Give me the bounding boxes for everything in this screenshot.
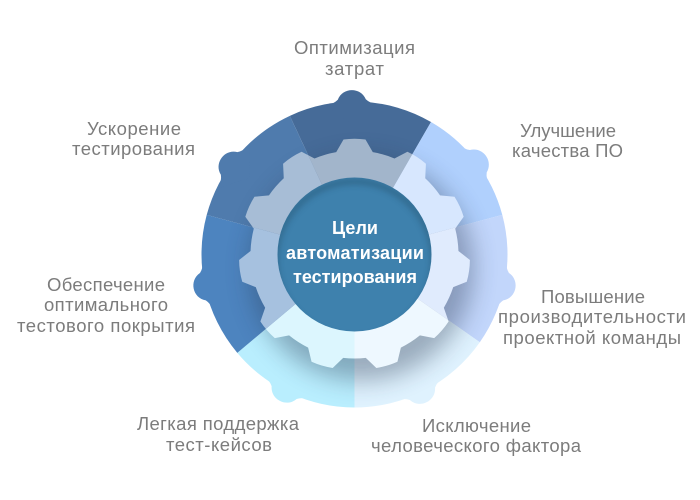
label: Повышение производительности проектной команды: производительности bbox=[498, 306, 686, 327]
label: Оптимизация затрат bbox=[294, 37, 415, 79]
label: Исключение человеческого фактора bbox=[371, 415, 582, 456]
label: Легкая поддержка тест-кейсов: Легкая поддержка bbox=[137, 413, 300, 434]
sector: Обеспечение тестового покрытия bbox=[188, 215, 354, 353]
label: Ускорение тестирования: Ускорение bbox=[87, 118, 181, 139]
label: Легкая поддержка тест-кейсов: тест-кейсов bbox=[166, 434, 272, 455]
diagram: gear wheel with seven sectors bbox=[188, 90, 521, 414]
centre title: тестирования bbox=[293, 267, 417, 287]
label: Ускорение тестирования bbox=[72, 118, 195, 159]
gear shadow bbox=[250, 156, 474, 380]
sector: Ускорение тестирования bbox=[206, 116, 354, 254]
sector: Исключение человеческого фактора bbox=[354, 254, 480, 414]
label: Обеспечение оптимального тестового покрытия: оптимального bbox=[44, 294, 168, 315]
centre disc bbox=[276, 178, 434, 340]
label: Исключение человеческого фактора: Исключение bbox=[422, 415, 531, 436]
label: Улучшение качества ПО: качества ПО bbox=[512, 140, 623, 161]
label: Улучшение качества ПО bbox=[512, 120, 623, 161]
centre title: автоматизации bbox=[286, 243, 424, 263]
label: Оптимизация затрат: затрат bbox=[325, 58, 385, 79]
sector: Улучшение качества ПО bbox=[354, 122, 502, 254]
centre title bbox=[286, 218, 424, 287]
label: Ускорение тестирования: тестирования bbox=[72, 138, 195, 159]
sector: Легкая поддержка тест-кейсов bbox=[237, 254, 354, 413]
label: Улучшение качества ПО: Улучшение bbox=[520, 120, 616, 141]
label: Исключение человеческого фактора: человеческого фактора bbox=[371, 435, 582, 456]
label: Оптимизация затрат: Оптимизация bbox=[294, 37, 415, 58]
label: Повышение производительности проектной команды: проектной команды bbox=[503, 327, 681, 348]
label: Повышение производительности проектной команды: Повышение bbox=[541, 286, 645, 307]
sector: Повышение производительности bbox=[354, 215, 521, 342]
label: Обеспечение оптимального тестового покрытия: Обеспечение bbox=[47, 274, 165, 295]
sector: Оптимизация затрат bbox=[290, 90, 431, 254]
label: Обеспечение оптимального тестового покрытия bbox=[17, 274, 195, 336]
label: Легкая поддержка тест-кейсов bbox=[137, 413, 300, 455]
label: Обеспечение оптимального тестового покрытия: тестового покрытия bbox=[17, 315, 195, 336]
label: Повышение производительности проектной команды bbox=[498, 286, 686, 348]
centre title: Цели bbox=[332, 218, 378, 238]
gear bbox=[239, 138, 470, 368]
